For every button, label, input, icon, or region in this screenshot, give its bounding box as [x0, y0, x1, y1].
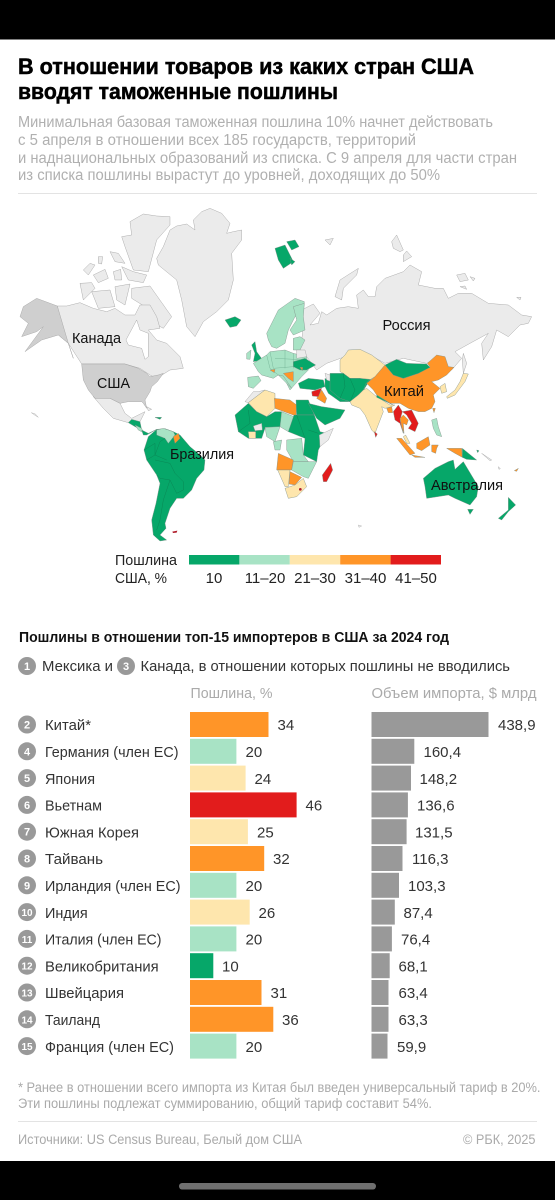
row: Italy: 11: [22, 935, 33, 946]
top black bar: [0, 0, 555, 40]
Europe and Middle East: [225, 298, 372, 403]
row: India: Индия: [45, 905, 88, 922]
row: Japan: [18, 766, 457, 791]
row: France: 59,9: [397, 1039, 426, 1056]
Africa: [235, 390, 333, 498]
legend: Пошлина: [115, 552, 178, 569]
title: вводят таможенные пошлины: [18, 79, 338, 104]
row: China: Китай*: [45, 717, 91, 734]
footnote: Эти пошлины подлежат суммированию, общий тариф составит 54%.: [18, 1096, 432, 1111]
row: United Kingdom: 68,1: [398, 958, 428, 975]
row: Vietnam: [18, 792, 455, 817]
row: Japan: 24: [254, 771, 271, 788]
row: India: 87,4: [404, 905, 433, 922]
legend: 11–20: [245, 570, 285, 587]
row: India: 26: [258, 905, 275, 922]
row: Ireland: 103,3: [408, 878, 446, 895]
row: United Kingdom: 10: [222, 958, 239, 975]
row: Switzerland: 63,4: [398, 985, 428, 1002]
column heading: import: Объем импорта, $ млрд: [372, 685, 537, 702]
map labels: Австралия: [431, 477, 503, 494]
row: Vietnam: 136,6: [417, 798, 455, 815]
note on Mexico and Canada: Мексика и: [42, 658, 113, 675]
footnote: * Ранее в отношении всего импорта из Китая был введен универсальный тариф в 20%.: [18, 1080, 540, 1095]
footnote: [18, 1080, 540, 1111]
map labels: США: [97, 375, 130, 392]
row: Italy: Италия (член ЕС): [45, 932, 162, 949]
row: South Korea: 25: [257, 824, 274, 841]
North America: [20, 208, 242, 408]
bottom black bar: [0, 1161, 555, 1200]
row: Taiwan: 116,3: [412, 851, 448, 868]
row: Germany: 160,4: [424, 744, 461, 761]
row: Italy: 20: [246, 932, 262, 949]
row: Taiwan: [18, 846, 448, 871]
row: Thailand: [18, 1007, 428, 1032]
row: Italy: [18, 926, 430, 951]
legend: [115, 552, 441, 587]
legend: 41–50: [395, 570, 437, 587]
subtitle text: из списка пошлины вырастут до уровней, доходящих до 50%: [18, 167, 440, 184]
title: В отношении товаров из каких стран США: [18, 54, 474, 79]
Mexico, Central and South America: [31, 397, 205, 541]
row: Germany: 20: [246, 744, 262, 761]
legend: США, %: [115, 570, 167, 587]
row: China: 2: [24, 720, 30, 732]
world map: [20, 208, 532, 541]
row: Ireland: 20: [246, 878, 262, 895]
row: Germany: [18, 739, 461, 764]
legend: 21–30: [294, 570, 336, 587]
row: Ireland: [18, 873, 446, 898]
row: Thailand: 36: [282, 1012, 299, 1029]
map labels: Россия: [382, 317, 430, 334]
row: China: 438,9: [498, 717, 536, 734]
title: [18, 54, 474, 104]
map labels: Бразилия: [170, 446, 234, 463]
row: United Kingdom: 12: [21, 962, 33, 973]
note on Mexico and Canada: 3: [123, 661, 129, 673]
copyright: © РБК, 2025: [463, 1132, 536, 1147]
row: Japan: Япония: [45, 771, 95, 788]
row: Thailand: 14: [21, 1015, 33, 1026]
row: United Kingdom: Великобритания: [45, 958, 159, 975]
row: India: [18, 900, 433, 925]
row: Vietnam: 6: [24, 800, 30, 812]
note on Mexico and Canada: 1: [24, 661, 30, 673]
legend: 31–40: [345, 570, 386, 587]
row: China: 34: [278, 717, 294, 734]
map labels: Канада: [72, 330, 122, 347]
row: France: Франция (член ЕС): [45, 1039, 174, 1056]
Central, South and East Asia: [330, 349, 468, 437]
row: Germany: 4: [24, 746, 31, 758]
subtitle text: с 5 апреля в отношении всех 185 государств, территорий: [18, 132, 416, 149]
row: South Korea: 131,5: [415, 824, 453, 841]
row: South Korea: [18, 819, 453, 844]
row: France: 15: [21, 1042, 33, 1053]
row: China: [18, 712, 536, 737]
map labels: [72, 317, 503, 494]
row: India: 10: [21, 908, 33, 919]
Arabia, Indonesia and Oceania: [308, 403, 518, 527]
row: Vietnam: 46: [306, 798, 322, 815]
chart heading: Пошлины в отношении топ-15 импортеров в США за 2024 год: [19, 630, 449, 646]
row: France: 20: [246, 1039, 262, 1056]
subtitle text: Минимальная базовая таможенная пошлина 10% начнет действовать: [18, 114, 493, 131]
row: Thailand: Таиланд: [45, 1012, 100, 1029]
table rows: [18, 712, 536, 1059]
sources: Источники: US Census Bureau, Белый дом США: [18, 1132, 302, 1147]
row: Taiwan: 8: [24, 854, 30, 866]
row: Ireland: Ирландия (член ЕС): [45, 878, 180, 895]
row: Switzerland: 31: [270, 985, 287, 1002]
row: South Korea: 7: [24, 827, 30, 839]
column heading: tariff: Пошлина, %: [190, 685, 272, 702]
row: South Korea: Южная Корея: [45, 824, 139, 841]
map labels: Китай: [384, 383, 424, 400]
row: France: [18, 1034, 426, 1059]
row: United Kingdom: [18, 953, 428, 978]
row: Italy: 76,4: [401, 932, 430, 949]
subtitle text: и наднациональных образований из списка. С 9 апреля для части стран: [18, 150, 517, 167]
row: Taiwan: 32: [273, 851, 290, 868]
row: Germany: Германия (член ЕС): [45, 744, 178, 761]
row: Switzerland: Швейцария: [45, 985, 124, 1002]
row: Switzerland: 13: [21, 988, 33, 1000]
row: Thailand: 63,3: [398, 1012, 428, 1029]
legend: 10: [206, 570, 222, 587]
row: Ireland: 9: [24, 880, 30, 892]
row: Switzerland: [18, 980, 428, 1005]
row: Japan: 148,2: [420, 771, 457, 788]
note on Mexico and Canada: Канада, в отношении которых пошлины не вводились: [140, 658, 510, 675]
Russia and northern islands: [275, 235, 532, 373]
row: Taiwan: Тайвань: [45, 851, 103, 868]
subtitle text: [18, 114, 517, 184]
row: Vietnam: Вьетнам: [45, 798, 102, 815]
row: Japan: 5: [24, 773, 30, 785]
